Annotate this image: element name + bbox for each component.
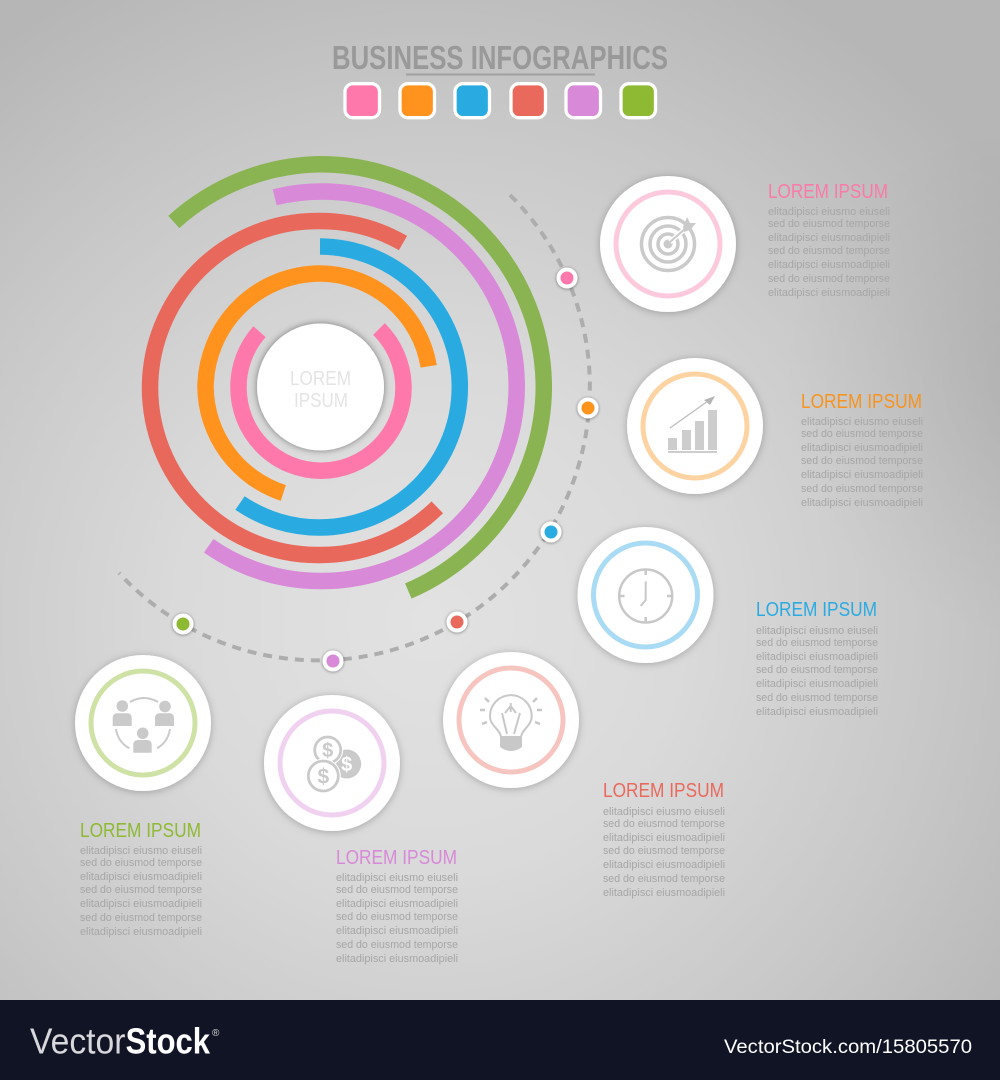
text block: pink: elitadipisci eiusmoadipieli: [768, 232, 890, 244]
text block: green: elitadipisci eiusmoadipieli: [80, 926, 202, 938]
text block: pink: sed do eiusmod temporse: [768, 218, 890, 230]
text block: orange: elitadipisci eiusmo eiuseli: [801, 416, 923, 428]
connector dots: [174, 270, 596, 670]
text block: blue: elitadipisci eiusmo eiuseli: [756, 625, 878, 637]
text block: pink: elitadipisci eiusmoadipieli: [768, 259, 890, 271]
text block: red: elitadipisci eiusmoadipieli: [603, 832, 725, 844]
centre circle: [257, 324, 384, 450]
text block: green: LOREM IPSUM: [80, 820, 201, 842]
text block: blue: [756, 599, 878, 718]
text block: green: sed do eiusmod temporse: [80, 884, 202, 896]
text block: purple: sed do eiusmod temporse: [336, 884, 458, 896]
text block: green: sed do eiusmod temporse: [80, 912, 202, 924]
footer logo: Vector: [30, 1020, 126, 1062]
icon: coins: $: [341, 754, 352, 776]
orange ring: [206, 274, 429, 493]
footer logo: Stock: [126, 1020, 211, 1062]
purple ring: [209, 191, 517, 581]
text block: red: sed do eiusmod temporse: [603, 873, 725, 885]
text block: purple: [336, 847, 458, 965]
badge: target: [600, 176, 736, 312]
badge: clock: [578, 527, 714, 663]
text block: purple: sed do eiusmod temporse: [336, 939, 458, 951]
text block: purple: LOREM IPSUM: [336, 847, 457, 869]
text block: blue: sed do eiusmod temporse: [756, 664, 878, 676]
badge: growth chart: [627, 358, 763, 494]
text block: blue: LOREM IPSUM: [756, 599, 877, 621]
text block: red: [603, 780, 725, 899]
text block: red: sed do eiusmod temporse: [603, 818, 725, 830]
text block: green: elitadipisci eiusmoadipieli: [80, 871, 202, 883]
text block: orange: elitadipisci eiusmoadipieli: [801, 442, 923, 454]
green ring: [174, 164, 544, 591]
badge: coins: [264, 695, 400, 831]
dashed connector arc: [119, 195, 590, 660]
icon: coins: $: [317, 766, 329, 788]
colour swatches: [345, 84, 656, 118]
footer logo: ®: [212, 1028, 220, 1039]
concentric ring chart: [150, 164, 544, 591]
pink ring: [238, 329, 404, 471]
icon: coins: $: [322, 740, 333, 762]
centre circle: LOREM: [290, 368, 351, 390]
text block: green: elitadipisci eiusmo eiuseli: [80, 845, 202, 857]
text block: orange: elitadipisci eiusmoadipieli: [801, 497, 923, 509]
text block: orange: sed do eiusmod temporse: [801, 428, 923, 440]
text block: orange: sed do eiusmod temporse: [801, 455, 923, 467]
centre circle: IPSUM: [294, 390, 348, 412]
text block: purple: elitadipisci eiusmoadipieli: [336, 925, 458, 937]
icon: target: [642, 217, 696, 270]
text block: red: elitadipisci eiusmoadipieli: [603, 859, 725, 871]
text block: pink: [768, 181, 890, 299]
text block: red: elitadipisci eiusmoadipieli: [603, 887, 725, 899]
text block: blue: elitadipisci eiusmoadipieli: [756, 706, 878, 718]
icon: people: [113, 698, 174, 753]
text block: purple: sed do eiusmod temporse: [336, 911, 458, 923]
icon: clock: [619, 570, 672, 622]
badge: team: [75, 655, 211, 791]
text block: blue: elitadipisci eiusmoadipieli: [756, 678, 878, 690]
red ring: [150, 221, 437, 555]
badge: light bulb: [443, 652, 579, 788]
text block: red: elitadipisci eiusmo eiuseli: [603, 806, 725, 818]
text block: green: [80, 820, 202, 938]
text block: pink: LOREM IPSUM: [768, 181, 888, 203]
text block: orange: sed do eiusmod temporse: [801, 483, 923, 495]
text block: red: sed do eiusmod temporse: [603, 845, 725, 857]
icon: coins: [306, 734, 361, 794]
text block: pink: sed do eiusmod temporse: [768, 273, 890, 285]
text block: green: elitadipisci eiusmoadipieli: [80, 898, 202, 910]
text block: pink: sed do eiusmod temporse: [768, 245, 890, 257]
text block: orange: elitadipisci eiusmoadipieli: [801, 469, 923, 481]
icon: bar chart: [668, 396, 717, 453]
text block: purple: elitadipisci eiusmoadipieli: [336, 953, 458, 965]
text block: purple: elitadipisci eiusmoadipieli: [336, 898, 458, 910]
title: BUSINESS INFOGRAPHICS: [332, 39, 668, 76]
footer url: VectorStock.com/15805570: [724, 1037, 972, 1058]
text block: orange: [801, 391, 923, 509]
text block: blue: elitadipisci eiusmoadipieli: [756, 651, 878, 663]
icon: light bulb: [480, 695, 542, 751]
text block: blue: sed do eiusmod temporse: [756, 692, 878, 704]
text block: green: sed do eiusmod temporse: [80, 857, 202, 869]
footer bar: [0, 1000, 1000, 1080]
text block: purple: elitadipisci eiusmo eiuseli: [336, 872, 458, 884]
text block: pink: elitadipisci eiusmoadipieli: [768, 287, 890, 299]
footer logo: [30, 1020, 220, 1062]
text block: red: LOREM IPSUM: [603, 780, 724, 802]
text block: pink: elitadipisci eiusmo eiuseli: [768, 206, 890, 218]
text block: blue: sed do eiusmod temporse: [756, 637, 878, 649]
blue ring: [240, 246, 460, 528]
text block: orange: LOREM IPSUM: [801, 391, 922, 413]
